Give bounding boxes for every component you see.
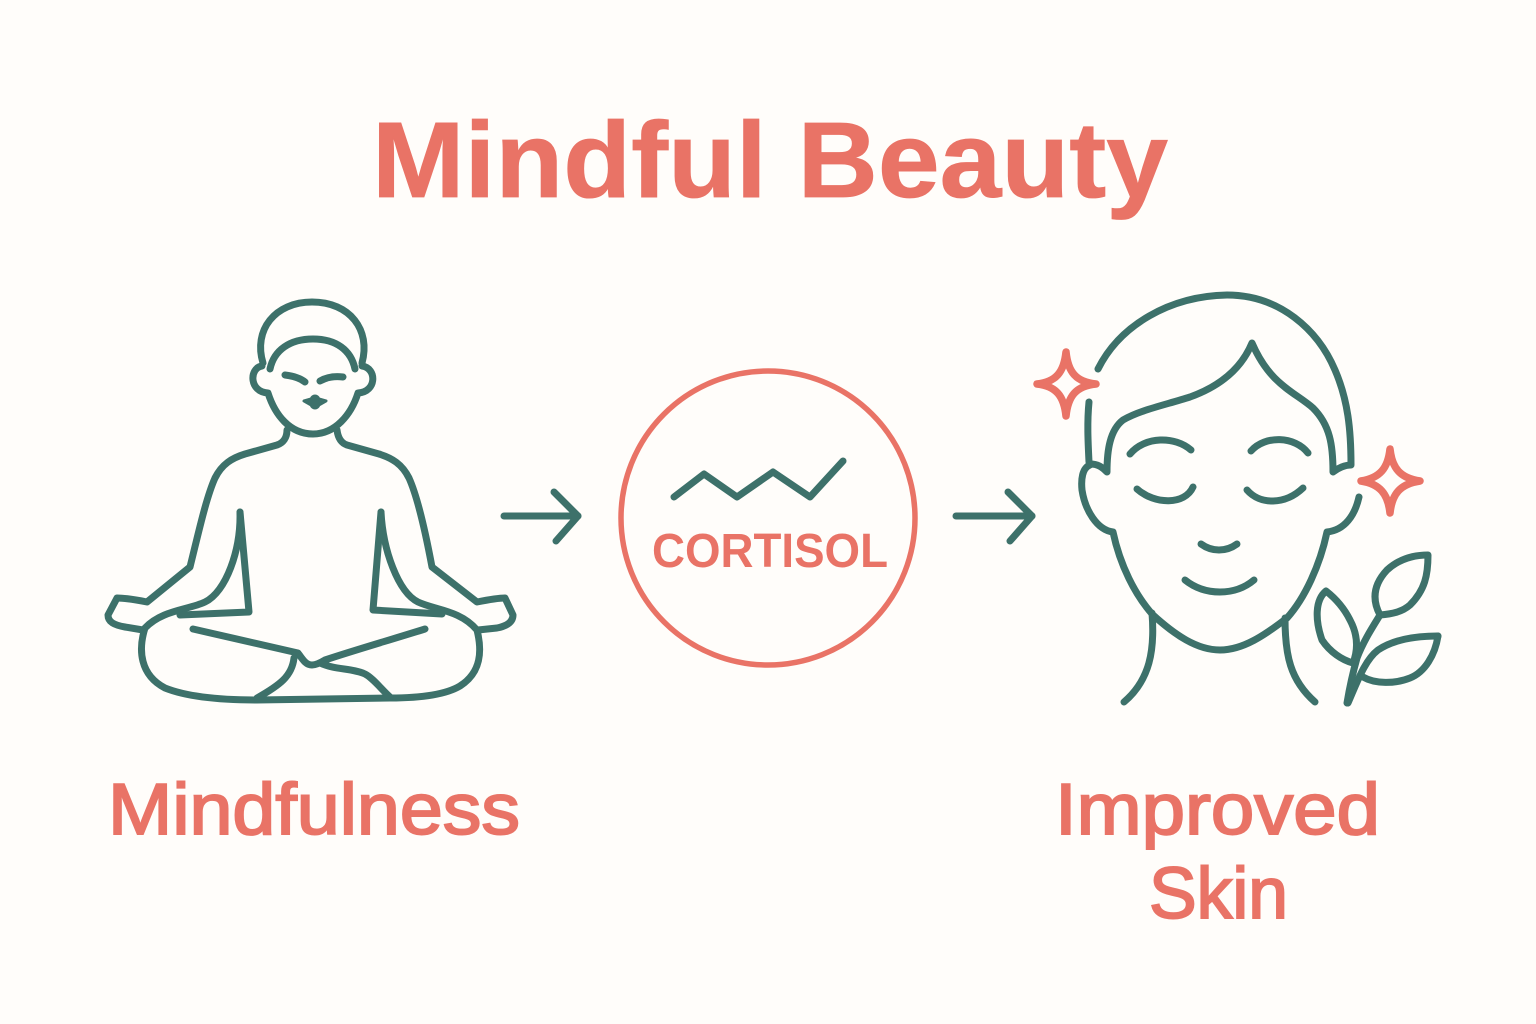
label: improved skin: Improved: [1055, 770, 1380, 850]
icon: right sparkle: [1361, 449, 1420, 513]
label: mindfulness: Mindfulness: [108, 770, 520, 850]
arrow: cortisol to improved skin: [956, 492, 1032, 541]
arrow: mindfulness to cortisol: [504, 492, 578, 541]
cortisol label: CORTISOL: [652, 525, 888, 578]
icon: left sparkle: [1037, 352, 1096, 416]
icon: leaf sprig: [1317, 555, 1438, 703]
title: Mindful Beauty: [372, 99, 1168, 220]
label: improved skin: Skin: [1149, 854, 1288, 934]
cortisol circle: [621, 371, 915, 665]
label: improved skin: [1055, 770, 1380, 934]
icon: face with closed eyes: [1082, 295, 1359, 702]
icon: meditating person: [108, 302, 513, 700]
icon: cortisol zigzag line: [674, 461, 843, 497]
